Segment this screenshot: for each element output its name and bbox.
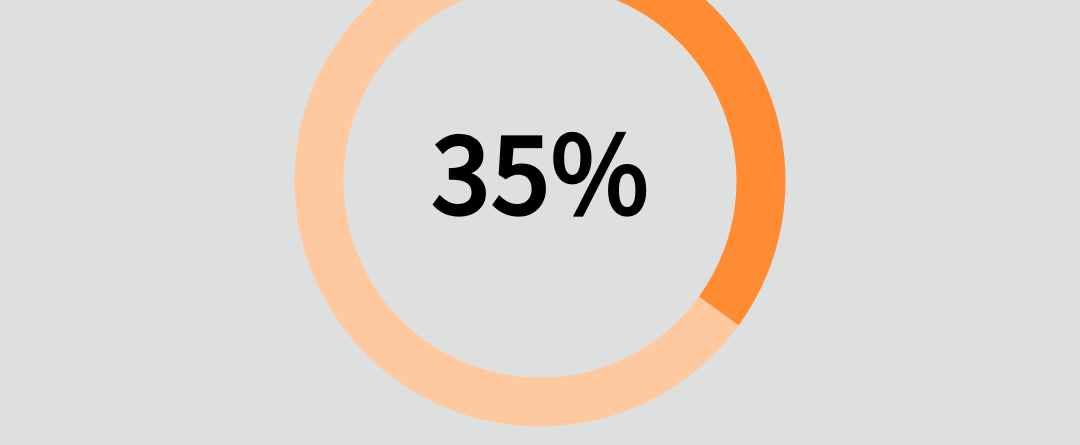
donut track: remaining 65% (319, 0, 761, 402)
center value: 35% (431, 90, 649, 246)
donut segment: 35% (540, 0, 761, 311)
